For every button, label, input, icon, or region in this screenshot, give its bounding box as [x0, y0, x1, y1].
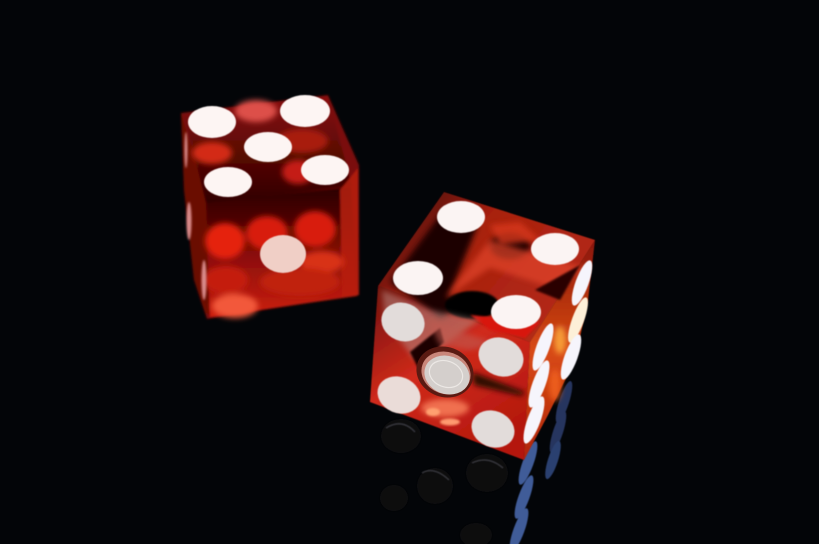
left die side pip glints	[184, 132, 206, 300]
left die white pips	[188, 95, 349, 273]
right die side reflections	[549, 326, 566, 401]
right die front face shadows and highlights	[382, 290, 525, 426]
right die center pip with recess	[409, 339, 481, 405]
left die reflected red pips	[192, 100, 344, 318]
right die side pips	[519, 258, 596, 446]
die: right	[370, 192, 596, 544]
reflection below right die	[380, 380, 576, 544]
die: left	[181, 95, 359, 319]
right die top face shadows and reflections	[390, 208, 585, 338]
right die faces	[370, 192, 595, 460]
right die top pips	[393, 201, 579, 329]
left die body	[181, 95, 359, 319]
right die front pips	[372, 296, 529, 454]
